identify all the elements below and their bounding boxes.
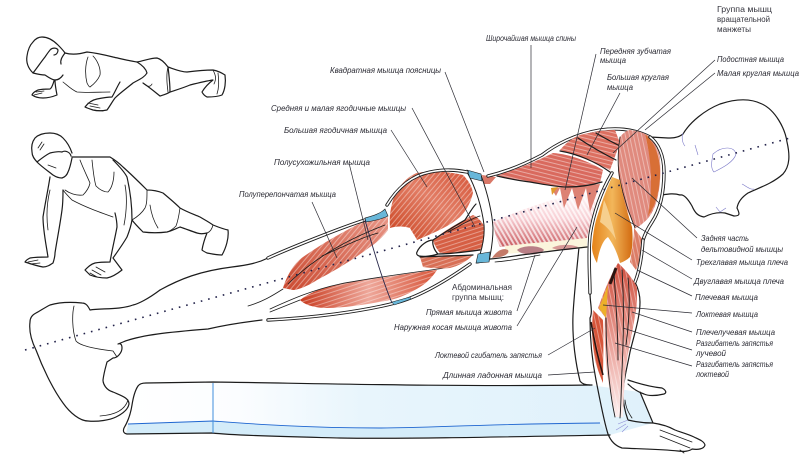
label: quadratus lumborum: [330, 65, 484, 172]
label: palmaris longus: [442, 370, 595, 380]
leg and shoes: [168, 67, 225, 97]
torso and shorts: [72, 157, 228, 255]
muscles: posterior deltoid: [618, 130, 664, 240]
muscles: triceps: [589, 173, 633, 293]
label: latissimus dorsi: [486, 33, 577, 168]
label: semitendinosus: [274, 157, 370, 240]
label: biceps: [642, 250, 784, 286]
small figure: push-up lower position: [27, 37, 225, 111]
head: [32, 133, 72, 178]
label: rotator cuff group line 3: манжеты: [717, 24, 751, 34]
label: biceps: Двуглавая мышца плеча: [693, 276, 784, 286]
label: serratus anterior: [565, 46, 671, 190]
label: extensor carpi ulnaris: Разгибатель запястья: [696, 359, 773, 369]
label: abdominal group: Абдоминальная: [452, 282, 512, 292]
label: brachialis: Плечевая мышца: [695, 292, 758, 302]
label: anconeus: Локтевая мышца: [695, 309, 758, 319]
label: brachioradialis: [632, 312, 775, 337]
far arm: [573, 247, 590, 385]
label: quadratus lumborum: Квадратная мышца поясницы: [330, 65, 442, 75]
muscles: hamstrings: [268, 217, 388, 290]
muscles: forearm extensors: [598, 263, 637, 418]
thigh cross-section line: [365, 220, 411, 305]
label: posterior deltoid: [632, 178, 784, 254]
label: rectus abdominis: [426, 255, 535, 317]
label: teres major: мышца: [607, 82, 633, 92]
label: rotator cuff group: Группа мышц: [717, 4, 772, 14]
near arm and hand: [85, 160, 132, 278]
label: external oblique: Наружная косая мышца живота: [394, 322, 512, 332]
label: latissimus dorsi: Широчайшая мышца спины: [486, 33, 577, 43]
muscles: teres and infraspinatus: [560, 130, 620, 172]
label: semitendinosus: Полусухожильная мышца: [274, 157, 370, 167]
label: palmaris longus: Длинная ладонная мышца: [442, 370, 542, 380]
label: serratus anterior: мышца: [600, 55, 626, 65]
muscles: lower thigh: [268, 264, 470, 320]
head: [650, 100, 789, 217]
muscles: forearm flexors: [591, 310, 603, 383]
waist cross-section band: [365, 170, 493, 263]
label: gluteus maximus: [284, 125, 427, 187]
label: posterior deltoid: Задняя часть: [701, 233, 749, 243]
muscles: latissimus dorsi: [482, 129, 650, 187]
label: extensor carpi ulnaris: локтевой: [695, 369, 729, 379]
label: teres minor: [645, 68, 799, 130]
label: semimembranosus: [239, 189, 337, 258]
label: triceps: [615, 213, 788, 267]
label: posterior deltoid: дельтовидной мышцы: [701, 244, 784, 254]
dotted axis line: [25, 138, 790, 350]
label: rectus abdominis: Прямая мышца живота: [426, 307, 512, 317]
far arm and hand: [25, 177, 63, 267]
head: [27, 37, 65, 80]
label: anconeus: [603, 305, 758, 319]
label: teres major: Большая круглая: [607, 72, 669, 82]
near arm: [590, 282, 705, 451]
muscles: abdominals: [490, 184, 600, 262]
muscles: gluteus medius and minimus: [417, 204, 487, 268]
label: gluteus maximus: Большая ягодичная мышца: [284, 125, 387, 135]
small figure: push-up upper position: [25, 133, 228, 278]
label: gluteus medius and minimus: [271, 103, 475, 227]
label: flexor carpi ulnaris: Локтевой сгибатель запястья: [434, 350, 542, 360]
label: triceps: Трехглавая мышца плеча: [696, 257, 788, 267]
label: flexor carpi ulnaris: [434, 328, 595, 360]
label: brachialis: [637, 270, 758, 302]
label: extensor carpi radialis: Разгибатель запястья: [696, 338, 773, 348]
head detail: [682, 133, 754, 212]
label: infraspinatus: [613, 54, 784, 153]
label: external oblique: [394, 227, 577, 332]
label: extensor carpi radialis: лучевой: [695, 348, 726, 358]
muscles: gluteus maximus: [390, 172, 473, 240]
muscles: biceps and brachialis: [630, 228, 643, 282]
label: infraspinatus: Подостная мышца: [717, 54, 784, 64]
far arm and hand: [32, 80, 57, 98]
torso and shorts: [65, 52, 170, 96]
label: rotator cuff group line 2: вращательной: [717, 14, 770, 24]
near arm and hand: [85, 62, 147, 111]
label: brachioradialis: Плечелучевая мышца: [696, 327, 775, 337]
label: extensor carpi ulnaris: [615, 343, 773, 379]
label: serratus anterior: Передняя зубчатая: [600, 46, 671, 56]
exercise mat: [123, 382, 653, 438]
main figure: body outline: [30, 100, 789, 453]
label: abdominal group line 2: группа мышц:: [452, 292, 504, 302]
label: semimembranosus: Полуперепончатая мышца: [239, 189, 336, 199]
label: extensor carpi radialis: [623, 328, 773, 358]
label: teres major: [587, 72, 669, 155]
label: gluteus medius and minimus: Средняя и малая ягодичные мышцы: [271, 103, 407, 113]
